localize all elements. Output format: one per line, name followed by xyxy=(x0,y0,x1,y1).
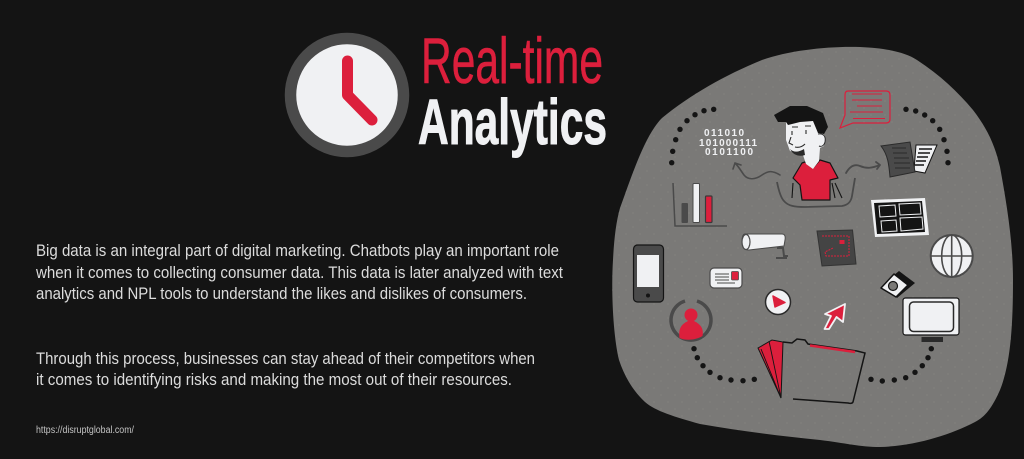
folder icon xyxy=(758,339,865,403)
monitor icon xyxy=(903,298,959,342)
text block: big data xyxy=(35,241,563,303)
security camera icon xyxy=(742,234,788,258)
dotted arc: top left xyxy=(669,107,716,165)
user icon xyxy=(671,301,711,340)
arrow: person to documents xyxy=(846,162,880,173)
bar chart icon xyxy=(673,183,727,226)
shirt xyxy=(793,160,838,200)
title xyxy=(418,24,607,158)
person illustration xyxy=(774,106,855,207)
arrow: binary to person xyxy=(733,163,780,179)
beard xyxy=(790,149,805,156)
binary digits: 0101100 xyxy=(705,147,753,158)
text block: process: Through this process, businesses can stay ahead of their competitors when xyxy=(36,349,535,368)
face and neck xyxy=(786,118,825,169)
binary digits xyxy=(699,128,757,158)
dotted arc: bottom left xyxy=(691,346,757,383)
tablet icon xyxy=(817,230,856,266)
text block: big data: Big data is an integral part of digital marketing. Chatbots play an important role xyxy=(36,241,559,260)
clock icon xyxy=(290,38,404,152)
speech bubble xyxy=(840,91,890,128)
globe icon xyxy=(931,235,973,277)
ID card icon xyxy=(710,268,742,288)
play button icon xyxy=(766,290,790,314)
text block: big data: analytics and NPL tools to understand the likes and dislikes of consumers. xyxy=(36,284,527,303)
dotted arc: bottom right xyxy=(868,346,934,384)
arms xyxy=(792,183,842,198)
panel: illustration blob xyxy=(612,47,1013,447)
ear xyxy=(818,134,825,146)
red sheets xyxy=(758,340,783,398)
title: Analytics xyxy=(418,86,607,158)
eyebrows, nose and smile xyxy=(789,126,811,147)
binary digits: 011010 xyxy=(704,128,744,139)
title: Real-time xyxy=(421,24,603,97)
binary digits: 101000111 xyxy=(699,138,757,149)
folder tab strip xyxy=(783,339,857,351)
hair xyxy=(774,106,828,134)
phone icon xyxy=(634,245,664,302)
documents icon xyxy=(881,142,937,177)
dotted arc: top right xyxy=(903,107,951,165)
small camera icon xyxy=(881,271,915,298)
text block: process xyxy=(36,349,535,389)
folder body xyxy=(793,351,865,403)
text block: big data: when it comes to collecting consumer data. This data is later analyzed with text xyxy=(35,263,563,282)
cursor arrow icon xyxy=(824,304,845,329)
desk curve xyxy=(777,178,855,207)
layout grid icon xyxy=(871,198,929,237)
source url: https://disruptglobal.com/ xyxy=(36,425,134,436)
text block: process: it comes to identifying risks and making the most out of their resources. xyxy=(36,370,512,389)
